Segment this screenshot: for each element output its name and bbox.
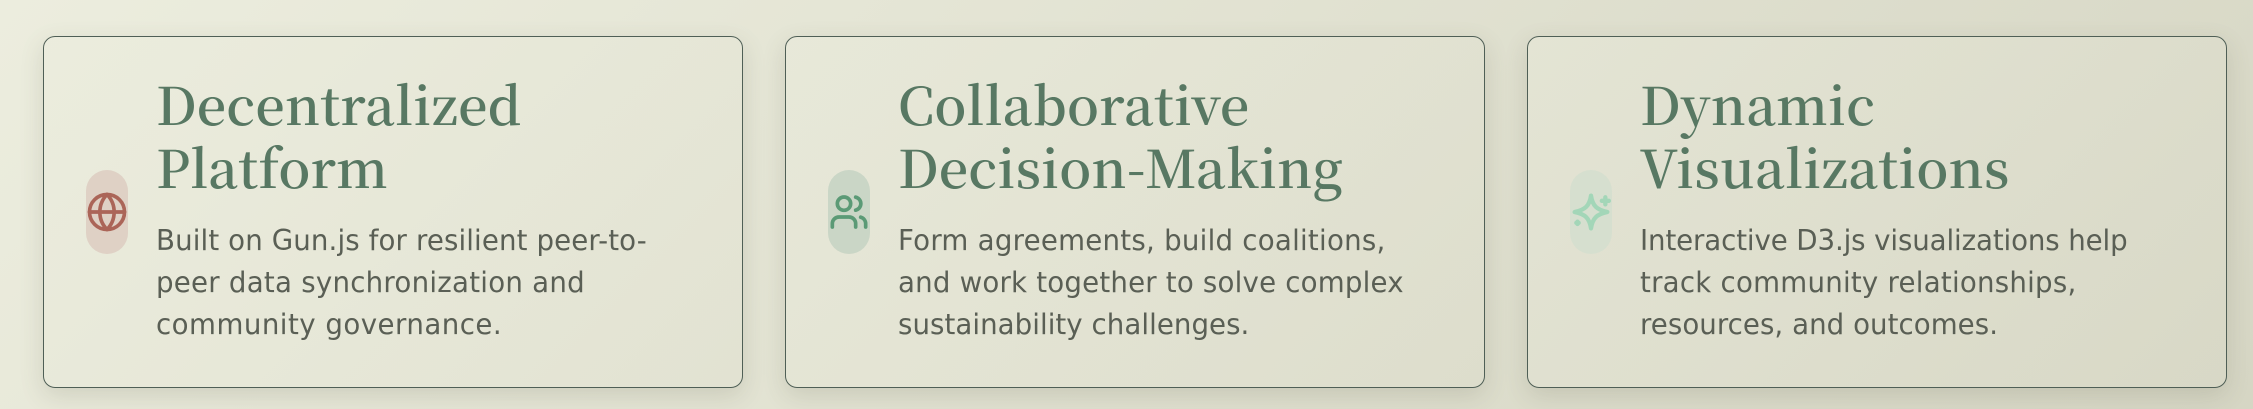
heading: Platform	[156, 128, 388, 202]
heading	[156, 65, 522, 202]
heading: Dynamic	[1640, 65, 1875, 140]
text block: resources, and outcomes.	[1640, 308, 1998, 341]
text block: peer data synchronization and	[156, 266, 585, 299]
icon: sparkles	[1570, 170, 1612, 254]
panel: Collaborative Decision-Making	[785, 36, 1485, 388]
heading	[898, 65, 1343, 202]
text block: community governance.	[156, 308, 502, 341]
heading: Decision-Making	[898, 128, 1343, 202]
text block: Interactive D3.js visualizations help	[1640, 224, 2128, 257]
heading: Decentralized	[156, 65, 522, 140]
text block: sustainability challenges.	[898, 308, 1249, 341]
heading: Collaborative	[898, 65, 1250, 140]
icon: people	[828, 170, 870, 254]
text block: Form agreements, build coalitions,	[898, 224, 1386, 257]
panel: Dynamic Visualizations	[1527, 36, 2227, 388]
text block: and work together to solve complex	[898, 266, 1404, 299]
heading	[1640, 65, 2010, 202]
icon: globe	[86, 170, 128, 254]
panel: Decentralized Platform	[43, 36, 743, 388]
text block: track community relationships,	[1640, 266, 2076, 299]
heading: Visualizations	[1640, 128, 2010, 202]
text block	[1640, 224, 2128, 341]
text block: Built on Gun.js for resilient peer-to-	[156, 224, 647, 257]
text block	[156, 224, 647, 341]
text block	[898, 224, 1404, 341]
